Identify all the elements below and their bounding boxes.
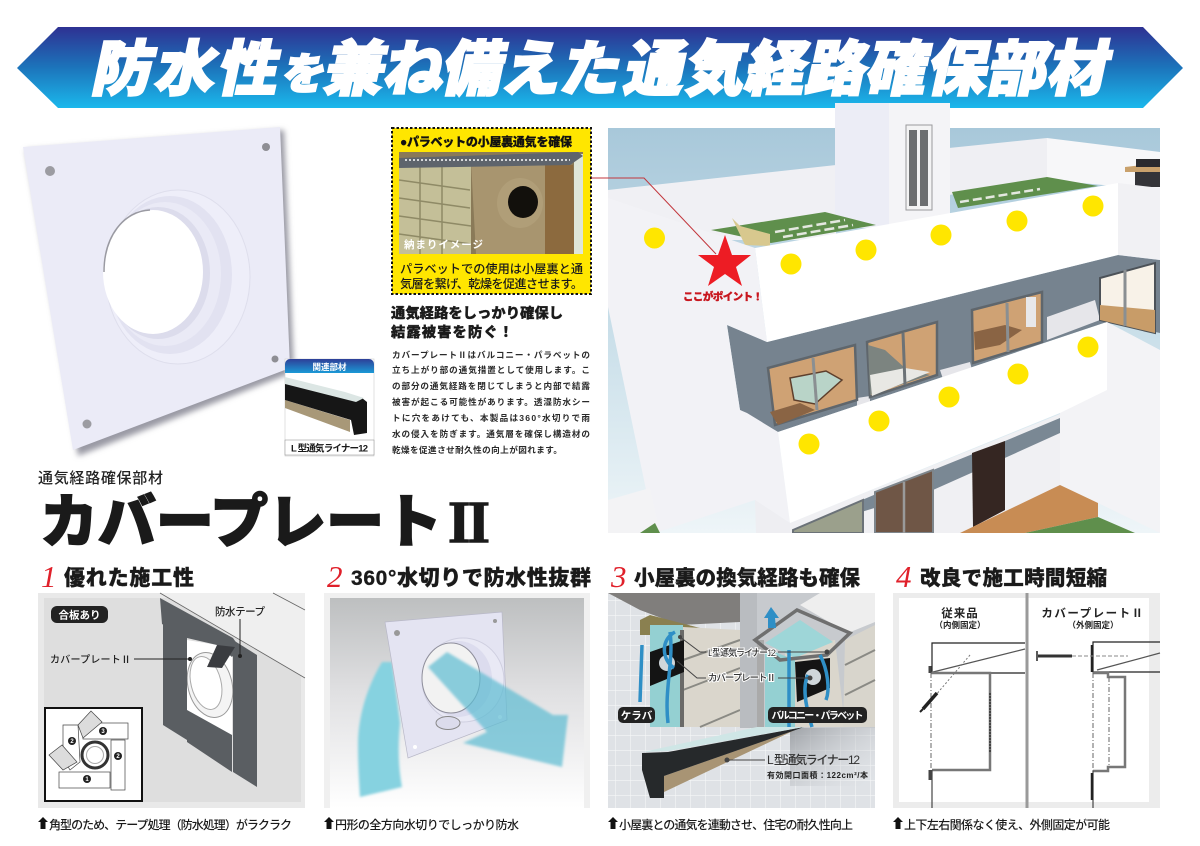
sub heading: 結露被害を防ぐ！ xyxy=(391,323,513,341)
related part header: 関連部材 xyxy=(312,362,347,372)
panel 4: fixing comparison xyxy=(893,593,1160,808)
label: cover plate II xyxy=(1041,607,1145,630)
plate xyxy=(385,612,507,758)
label: waterproof tape xyxy=(215,605,266,658)
liner label: 有効開口面積：122cm²/本 xyxy=(767,770,868,780)
body text: カバープレートⅡはバルコニー・パラベットの xyxy=(392,350,590,360)
label: cover plate: カバープレートⅡ xyxy=(50,654,131,666)
section 1 heading: 優れた施工性 xyxy=(64,567,194,590)
caption 3: 小屋裏との通気を連動させ、住宅の耐久性向上 xyxy=(619,817,853,832)
label: waterproof tape: 防水テープ xyxy=(215,605,266,618)
plywood tag: 合板あり xyxy=(58,608,100,622)
callout heading: ●パラベットの小屋裏通気を確保 xyxy=(400,134,572,149)
body text: 被害が起こる可能性があります。透湿防水シー xyxy=(392,396,590,407)
body text: の部分の通気経路を閉じてしまうと内部で結露 xyxy=(392,380,590,391)
window 4 xyxy=(1100,263,1155,333)
section 1 heading xyxy=(41,559,194,594)
related part: L-shaped liner xyxy=(285,359,374,456)
tag: balcony parapet: バルコニー・パラベット xyxy=(772,710,864,722)
body text xyxy=(392,350,590,455)
gable end scene xyxy=(608,593,740,727)
inset: tape order: 3 xyxy=(101,729,105,735)
sub heading: 通気経路をしっかり確保し xyxy=(391,304,563,322)
point marker star xyxy=(683,235,763,303)
leader line xyxy=(591,178,716,254)
label: cover plate xyxy=(50,654,192,666)
tag: gable: ケラバ xyxy=(621,710,653,722)
liner illustration xyxy=(642,727,804,798)
opening with plate xyxy=(181,640,239,735)
inset: tape order: 2 xyxy=(70,739,74,745)
body text: 立ち上がり部の通気措置として使用します。こ xyxy=(392,364,590,375)
tower xyxy=(835,103,950,228)
section 4 heading: 4 xyxy=(896,559,912,594)
banner headline: 通気経路確保部材 xyxy=(619,36,1118,103)
body text: トに穴をあけても、本製品は360°水切りで雨 xyxy=(392,412,590,423)
water flow arrow right xyxy=(428,652,568,767)
title banner xyxy=(17,27,1183,108)
banner headline: 防水性 xyxy=(87,36,288,103)
product photo: cover plate xyxy=(23,127,294,456)
label: L liner (upper) xyxy=(678,635,830,659)
section 4 heading: 改良で施工時間短縮 xyxy=(920,566,1107,590)
inset: tape order: 2 xyxy=(116,754,120,760)
plywood tag xyxy=(51,606,108,623)
callout photo xyxy=(399,152,583,254)
product name: カバープレート xyxy=(40,490,442,555)
panel 2: 360 degree water drainage xyxy=(324,593,590,808)
banner headline xyxy=(87,36,1118,103)
water flow arrow left xyxy=(358,662,402,797)
tag: balcony parapet xyxy=(768,707,867,723)
yellow marker dots xyxy=(644,196,1104,454)
inset: tape order xyxy=(45,708,142,801)
product name: Ⅱ xyxy=(443,482,495,557)
caption 1: 角型のため、テープ処理（防水処理）がラクラク xyxy=(49,817,292,832)
liner photo xyxy=(285,377,367,435)
panel 3: attic ventilation xyxy=(608,593,875,808)
liner label: L 型通気ライナー12 xyxy=(767,752,860,767)
section drawing: cover plate II xyxy=(1037,642,1160,808)
label: L liner (upper): L 型通気ライナー12 xyxy=(708,647,776,659)
section 2 heading xyxy=(327,559,591,594)
product kicker: 通気経路確保部材 xyxy=(38,470,163,487)
callout text: パラベットでの使用は小屋裏と通 xyxy=(400,261,583,276)
callout: parapet ventilation xyxy=(392,128,591,294)
body text: 水の侵入を防ぎます。通気層を確保し構造材の xyxy=(392,428,590,439)
window 1 xyxy=(768,345,857,425)
label: cover plate: カバープレートⅡ xyxy=(708,673,776,684)
label: cover plate xyxy=(677,661,812,684)
label: conventional: （内側固定） xyxy=(934,620,986,630)
window 2 xyxy=(867,322,937,397)
label: conventional: 従来品 xyxy=(941,606,979,620)
label: cover plate II: （外側固定） xyxy=(1067,620,1119,630)
caption 2: 円形の全方向水切りでしっかり防水 xyxy=(335,817,519,832)
tag: gable xyxy=(618,707,655,723)
window 3 xyxy=(972,292,1042,363)
inset: tape order: 1 xyxy=(85,777,89,783)
section 2 heading: 360°水切りで防水性抜群 xyxy=(351,567,591,590)
callout text: 気層を繋げ、乾燥を促進させます。 xyxy=(400,276,583,291)
section 3 heading: 小屋裏の換気経路も確保 xyxy=(634,566,860,590)
label: conventional xyxy=(934,606,986,630)
building illustration xyxy=(608,103,1160,533)
section 2 heading: 2 xyxy=(327,559,342,594)
section drawing: conventional xyxy=(920,643,1025,808)
related part label: L 型通気ライナー12 xyxy=(291,442,368,454)
parapet scene xyxy=(755,593,875,728)
label: cover plate II: カバープレートⅡ xyxy=(1041,607,1145,620)
section 3 heading: 3 xyxy=(610,559,626,594)
section 4 heading xyxy=(896,559,1107,594)
banner headline: を xyxy=(278,51,331,99)
waterproof tape frame xyxy=(160,598,257,787)
liner label xyxy=(724,752,868,780)
body text: 乾燥を促進させ耐久性の向上が図れます。 xyxy=(392,444,562,455)
point marker star: ここがポイント！ xyxy=(683,290,763,303)
section 3 heading xyxy=(610,559,860,594)
banner headline: 兼ね備えた xyxy=(319,36,630,103)
panel 1: tape application xyxy=(38,593,305,808)
callout photo: 納まりイメージ xyxy=(404,238,484,251)
caption 4: 上下左右関係なく使え、外側固定が可能 xyxy=(904,817,1110,832)
section 1 heading: 1 xyxy=(41,559,56,594)
callout text xyxy=(400,261,583,291)
sub heading xyxy=(391,304,563,341)
